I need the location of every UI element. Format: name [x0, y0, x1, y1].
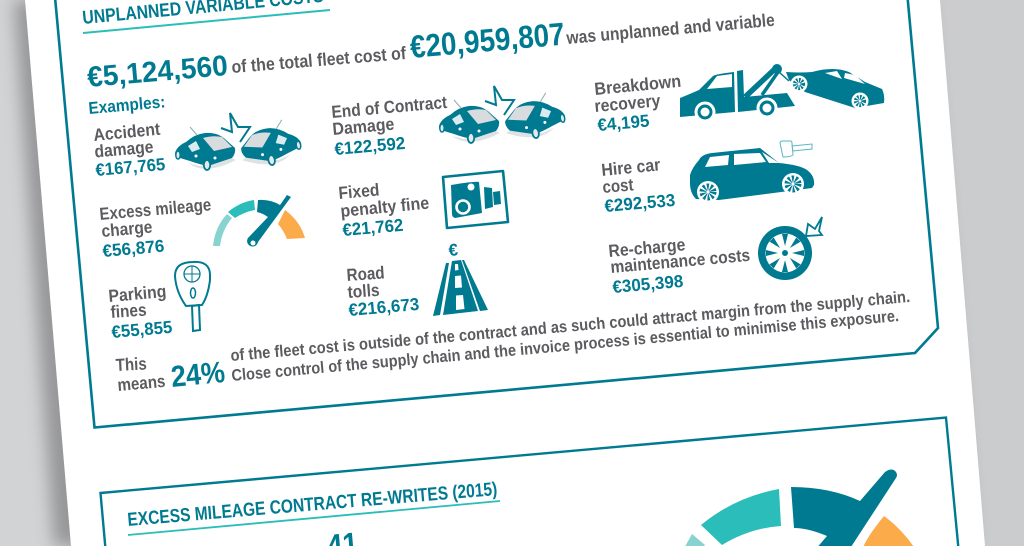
- item: excess mileage charge: €56,876: [102, 236, 165, 261]
- item: breakdown recovery: recovery: [594, 90, 661, 116]
- item: breakdown recovery: [593, 64, 884, 135]
- icon: speed camera: [443, 171, 508, 228]
- item: road tolls: €216,673: [348, 294, 420, 320]
- icon: parking meter: [175, 262, 210, 331]
- item: fixed penalty fine: penalty fine: [339, 193, 430, 221]
- item: hire car cost: [600, 141, 814, 216]
- item: fixed penalty fine: €21,762: [342, 215, 404, 240]
- summary statement: of the fleet cost is outside of the contract and as such could attract margin from the supply chain.: [230, 288, 911, 365]
- item: road tolls: Road: [346, 262, 385, 285]
- headline statement: of the total fleet cost of: [231, 43, 408, 77]
- item: end of contract damage: [331, 86, 568, 159]
- headline statement: was unplanned and variable: [565, 10, 776, 48]
- item: accident damage: Accident: [92, 119, 161, 145]
- item: end of contract damage: Damage: [332, 114, 395, 139]
- summary statement: Close control of the supply chain and the invoice process is essential to minimise this exposure.: [231, 307, 900, 385]
- icon: toll road: [433, 240, 488, 316]
- item: end of contract damage: End of Contract: [331, 92, 448, 122]
- panel: excess mileage contract re-writes frame: [100, 418, 958, 546]
- item: excess mileage charge: charge: [101, 217, 153, 241]
- item: re-charge maintenance costs: Re-charge: [608, 234, 686, 261]
- item: re-charge maintenance costs: €305,398: [612, 271, 684, 297]
- item: parking fines: Parking: [108, 281, 167, 306]
- headline statement: [86, 10, 776, 94]
- icon: damaged tyre: [758, 217, 822, 280]
- item: re-charge maintenance costs: maintenance costs: [610, 245, 751, 277]
- item: hire car cost: €292,533: [604, 190, 676, 216]
- big gauge: [682, 470, 916, 546]
- panel: unplanned variable costs frame: [55, 0, 938, 428]
- heading: excess mileage contract re-writes: EXCESS MILEAGE CONTRACT RE-WRITES (2015): [127, 479, 498, 531]
- icon: small gauge: [213, 195, 305, 247]
- icon: tow truck with car: [680, 64, 884, 122]
- item: accident damage: damage: [94, 136, 154, 161]
- item: accident damage: €167,765: [95, 154, 166, 180]
- summary statement: [115, 288, 911, 395]
- item: breakdown recovery: Breakdown: [593, 71, 682, 99]
- item: parking fines: [108, 262, 210, 342]
- summary statement: This: [115, 353, 147, 375]
- item: road tolls: [346, 240, 488, 320]
- item: excess mileage charge: Excess mileage: [99, 194, 212, 224]
- item: parking fines: €55,855: [111, 317, 173, 342]
- item: road tolls: tolls: [347, 280, 380, 302]
- icon: two crashed cars: [439, 86, 568, 143]
- item: fixed penalty fine: [338, 171, 508, 240]
- examples label: Examples:: [88, 92, 166, 118]
- headline statement: €20,959,807: [408, 16, 566, 65]
- item: parking fines: fines: [110, 300, 147, 322]
- summary statement: 24%: [170, 356, 226, 394]
- item: hire car cost: Hire car: [600, 154, 661, 180]
- icon: two crashed cars: [175, 113, 304, 170]
- item: hire car cost: cost: [602, 174, 634, 197]
- item: re-charge maintenance costs: [608, 217, 822, 297]
- item: accident damage: [92, 113, 304, 180]
- headline statement: €5,124,560: [86, 50, 229, 94]
- icon: hire car and key: [690, 141, 814, 203]
- item: fixed penalty fine: Fixed: [338, 179, 380, 203]
- item: breakdown recovery: €4,195: [597, 111, 650, 135]
- item: end of contract damage: €122,592: [334, 133, 406, 159]
- icon: toll road: €: [448, 240, 459, 260]
- summary statement: means: [117, 371, 166, 395]
- item: excess mileage charge: [99, 194, 305, 261]
- heading: excess mileage contract re-writes: [127, 479, 500, 535]
